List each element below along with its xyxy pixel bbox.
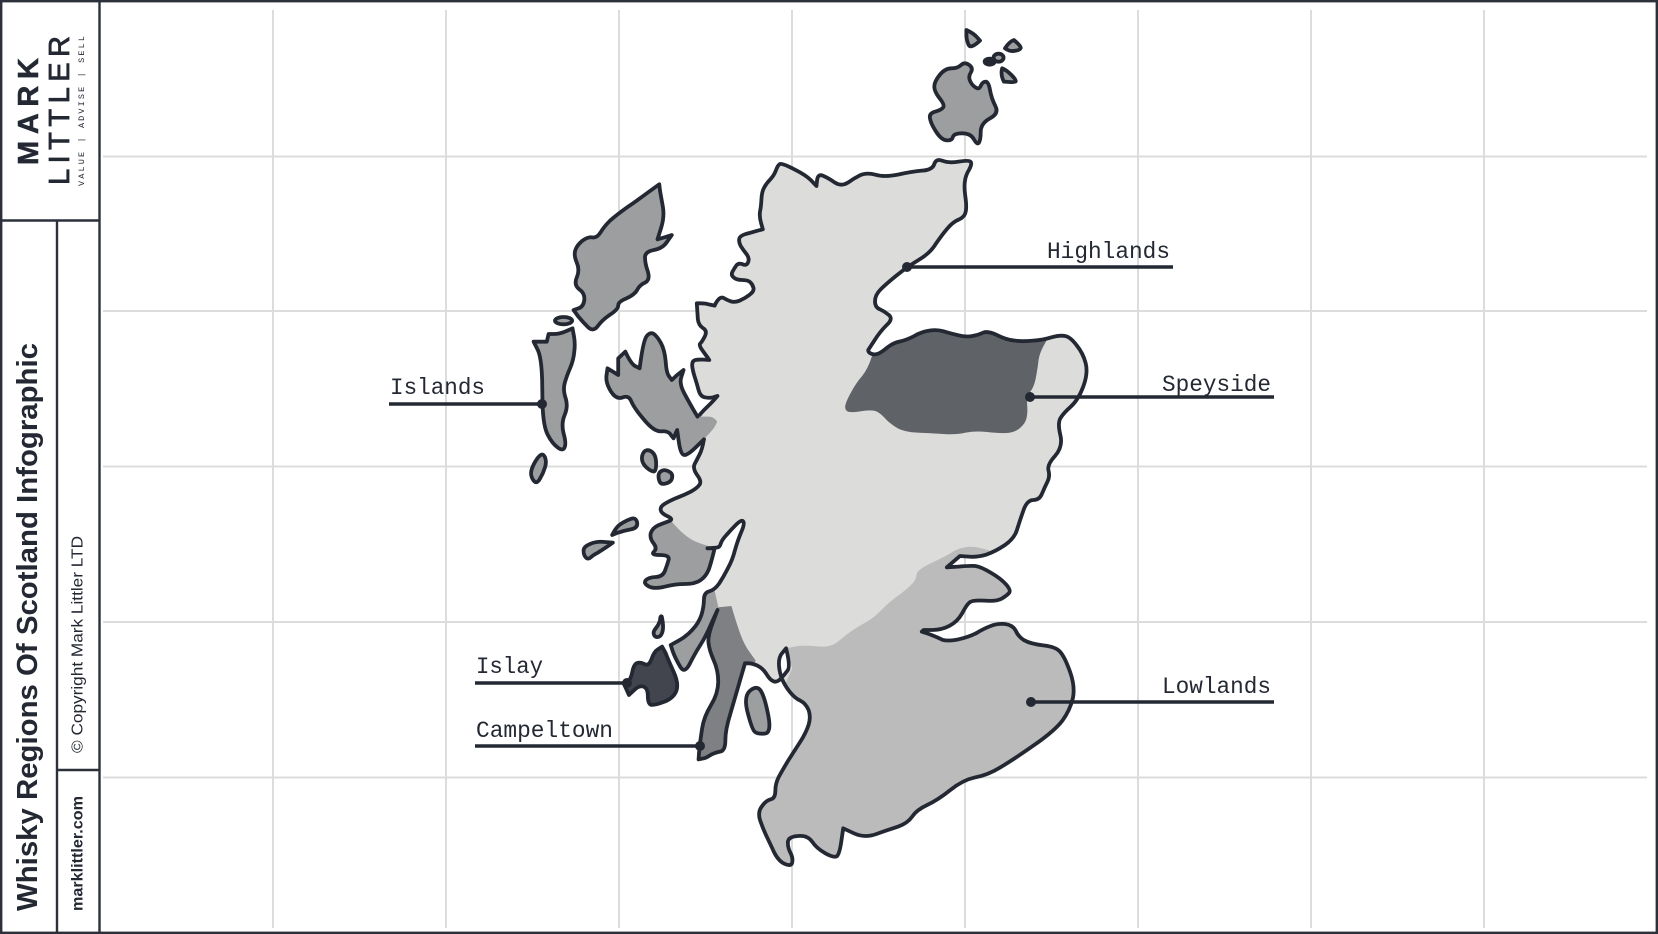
- island: Arran: [746, 688, 769, 734]
- islands: Orkney: [930, 30, 1021, 143]
- region: Campbeltown: [700, 606, 756, 757]
- label: Speyside: Speyside: [1162, 372, 1271, 398]
- label: Campeltown: Campeltown: [476, 718, 613, 744]
- label: Islay: [475, 654, 632, 688]
- island: Coll: [612, 518, 637, 535]
- map of Scotland: [531, 30, 1127, 887]
- label: Islands: [389, 375, 547, 409]
- label: Islands: Islands: [390, 375, 485, 401]
- label: Speyside: [1025, 372, 1274, 402]
- logo: Mark Littler: LITTLER: [44, 36, 76, 185]
- mainland coastline: [645, 160, 1087, 865]
- label: Highlands: [902, 239, 1173, 272]
- label: Campeltown: [475, 718, 705, 751]
- region: Islands (mainland peninsula): [646, 522, 712, 586]
- island: Rum: [642, 450, 656, 471]
- label: Lowlands: [1026, 674, 1274, 707]
- island: Barra: [531, 455, 546, 482]
- island: Eigg: [658, 470, 672, 484]
- logo: Mark Littler: MARK: [13, 58, 45, 165]
- island: Lewis and Harris: [574, 184, 672, 329]
- island: Scalpay: [555, 317, 572, 324]
- island: Uist: [534, 328, 575, 449]
- logo: Mark Littler: [13, 36, 87, 186]
- island: Tiree: [584, 542, 613, 559]
- logo: Mark Littler: VALUE | ADVISE | SELL: [77, 36, 87, 186]
- copyright: © Copyright Mark Littler LTD: [70, 536, 86, 753]
- website: marklittler.com: [70, 796, 86, 911]
- region: Islands (Knapdale strip): [673, 590, 718, 668]
- title: Whisky Regions Of Scotland Infographic: [12, 343, 44, 911]
- region: Lowlands: [761, 546, 1072, 864]
- Skye junction blob: [688, 417, 717, 439]
- label: Highlands: Highlands: [1047, 239, 1170, 265]
- island: Skye: [606, 333, 704, 455]
- region: Speyside: [845, 332, 1046, 434]
- label: Islay: Islay: [476, 654, 543, 680]
- island: Colonsay: [654, 616, 663, 637]
- label: Lowlands: Lowlands: [1162, 674, 1271, 700]
- island: Islay: [624, 647, 677, 705]
- region: Highlands: [645, 160, 1087, 865]
